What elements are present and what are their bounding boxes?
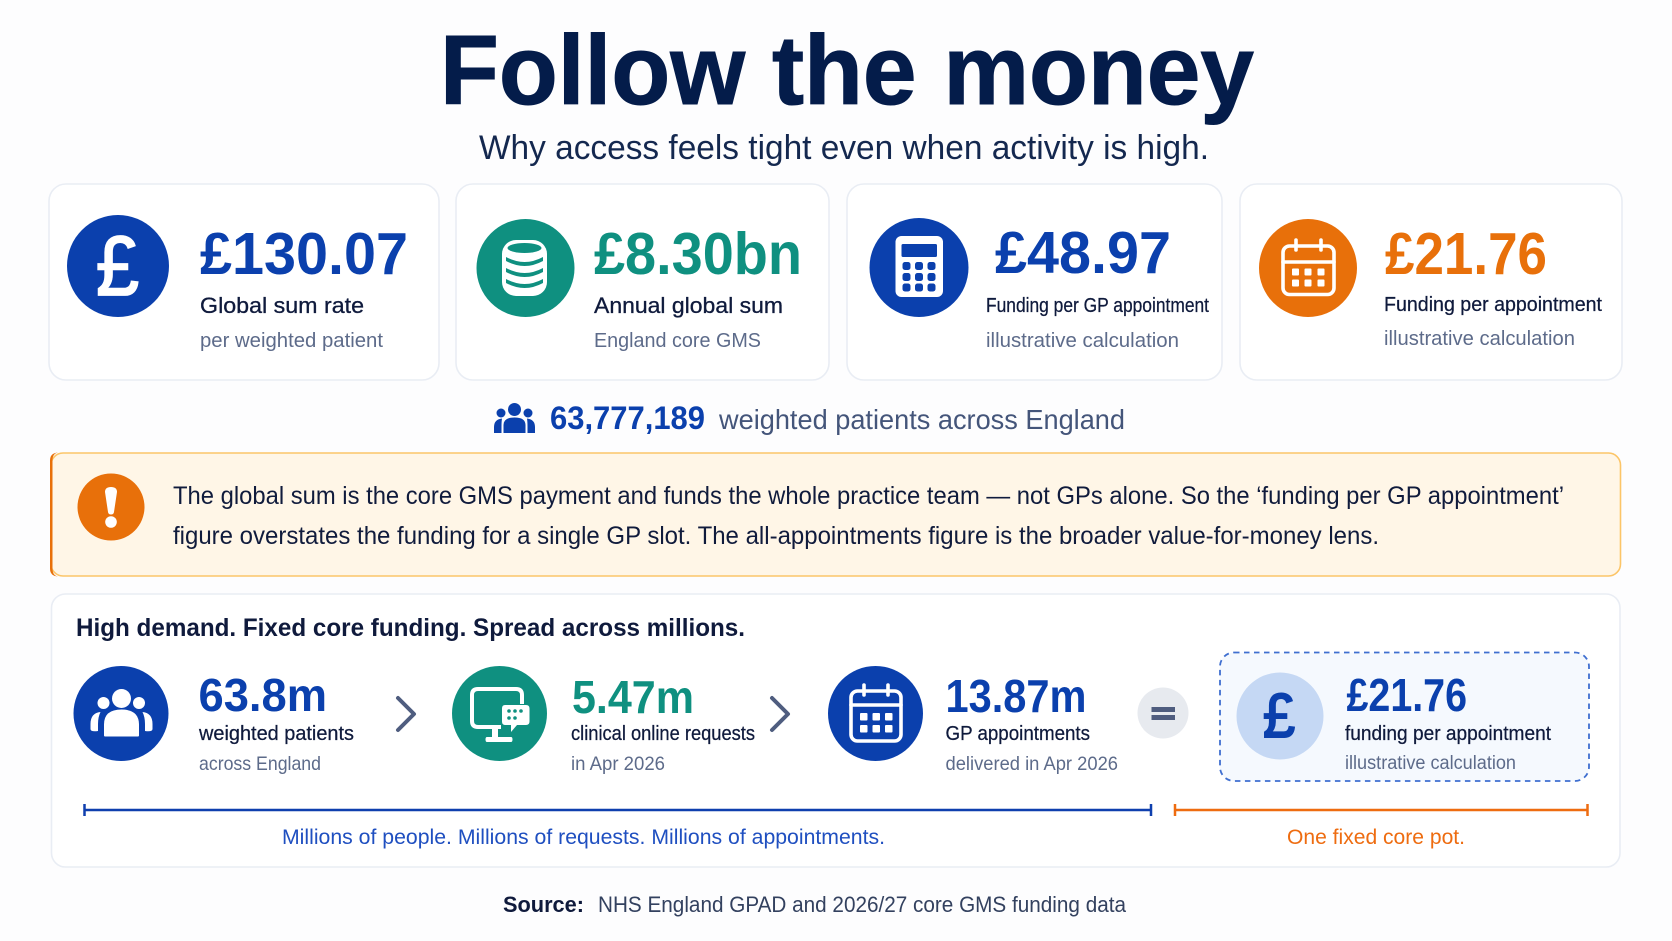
stat: 63.8m: 63.8m [198,669,327,721]
value: £8.30bn: £8.30bn [594,221,802,287]
stat: 5.47m: 5.47m [572,671,694,723]
source label: Source: [503,892,584,917]
note: illustrative calculation: illustrative calculation [986,329,1179,352]
caption: one fixed pot: One fixed core pot. [1287,826,1465,849]
callout text: The global sum is the core GMS payment and funds the whole practice team — not GPs alone. So the ‘funding per GP appointment’ [173,482,1564,510]
stat: 13.87m: 13.87m [946,670,1086,722]
note: across England: across England [199,753,321,775]
panel: global sum rate card [49,184,439,380]
icon: pound coin: £ [96,219,139,313]
value: £21.76: £21.76 [1385,221,1547,287]
note: in Apr 2026: in Apr 2026 [571,753,665,775]
panel: funding per GP appointment card [847,184,1222,380]
icon: people group [494,403,535,433]
label: weighted patients across England: weighted patients across England [718,404,1125,435]
weighted patients line [494,400,1125,436]
bracket: orange span [1175,804,1588,816]
caption: millions: Millions of people. Millions of requests. Millions of appointments. [282,826,885,849]
arrow: chevron two [772,698,788,730]
icon: coin stack [476,219,574,317]
icon: online request monitor [452,666,547,761]
icon: appointments calendar [828,666,923,761]
icon: pound coin [67,215,169,317]
title: Follow the money [440,15,1254,125]
subtitle: Why access feels tight even when activity is high. [479,129,1209,167]
icon: calculator [870,218,968,317]
note: per weighted patient: per weighted patient [200,329,383,352]
note: illustrative calculation: illustrative calculation [1345,753,1516,774]
note: England core GMS: England core GMS [594,329,761,352]
callout: global sum note [50,452,1620,576]
label: GP appointments: GP appointments [946,723,1090,745]
panel: demand and funding flow [52,594,1620,867]
icon: pound coin light: £ [1263,682,1295,751]
label: funding per appointment: Funding per appointment [1384,294,1602,316]
value: £48.97: £48.97 [995,220,1171,286]
label: global sum rate: Global sum rate [200,293,364,318]
note: illustrative calculation: illustrative calculation [1384,327,1575,350]
arrow: chevron one [398,698,414,730]
icon: patients group [74,666,168,761]
value: 63,777,189: 63,777,189 [550,400,705,436]
icon: equals sign [1138,688,1188,738]
label: clinical online requests: clinical online requests [571,723,755,745]
heading: High demand. Fixed core funding. Spread across millions. [76,614,745,642]
panel: funding per appointment card [1240,184,1622,380]
label: annual global sum: Annual global sum [594,293,783,318]
source text: NHS England GPAD and 2026/27 core GMS funding data [598,892,1127,917]
callout text: figure overstates the funding for a single GP slot. The all-appointments figure is the broader value-for-money lens. [173,522,1379,550]
result box: funding per appointment [1220,652,1589,781]
bracket: blue span [84,804,1151,816]
source line [503,892,1127,917]
panel: annual global sum card [456,184,829,380]
value: £130.07: £130.07 [200,221,408,287]
icon: exclamation mark [78,474,144,540]
note: delivered in Apr 2026: delivered in Apr 2026 [946,753,1118,775]
label: weighted patients: weighted patients [198,723,354,745]
icon: calendar [1259,219,1357,317]
label: funding per GP appointment: Funding per GP appointment [986,295,1209,317]
label: funding per appointment: funding per appointment [1345,723,1551,745]
stat: £21.76: £21.76 [1346,669,1467,721]
icon: pound coin light [1236,672,1324,760]
